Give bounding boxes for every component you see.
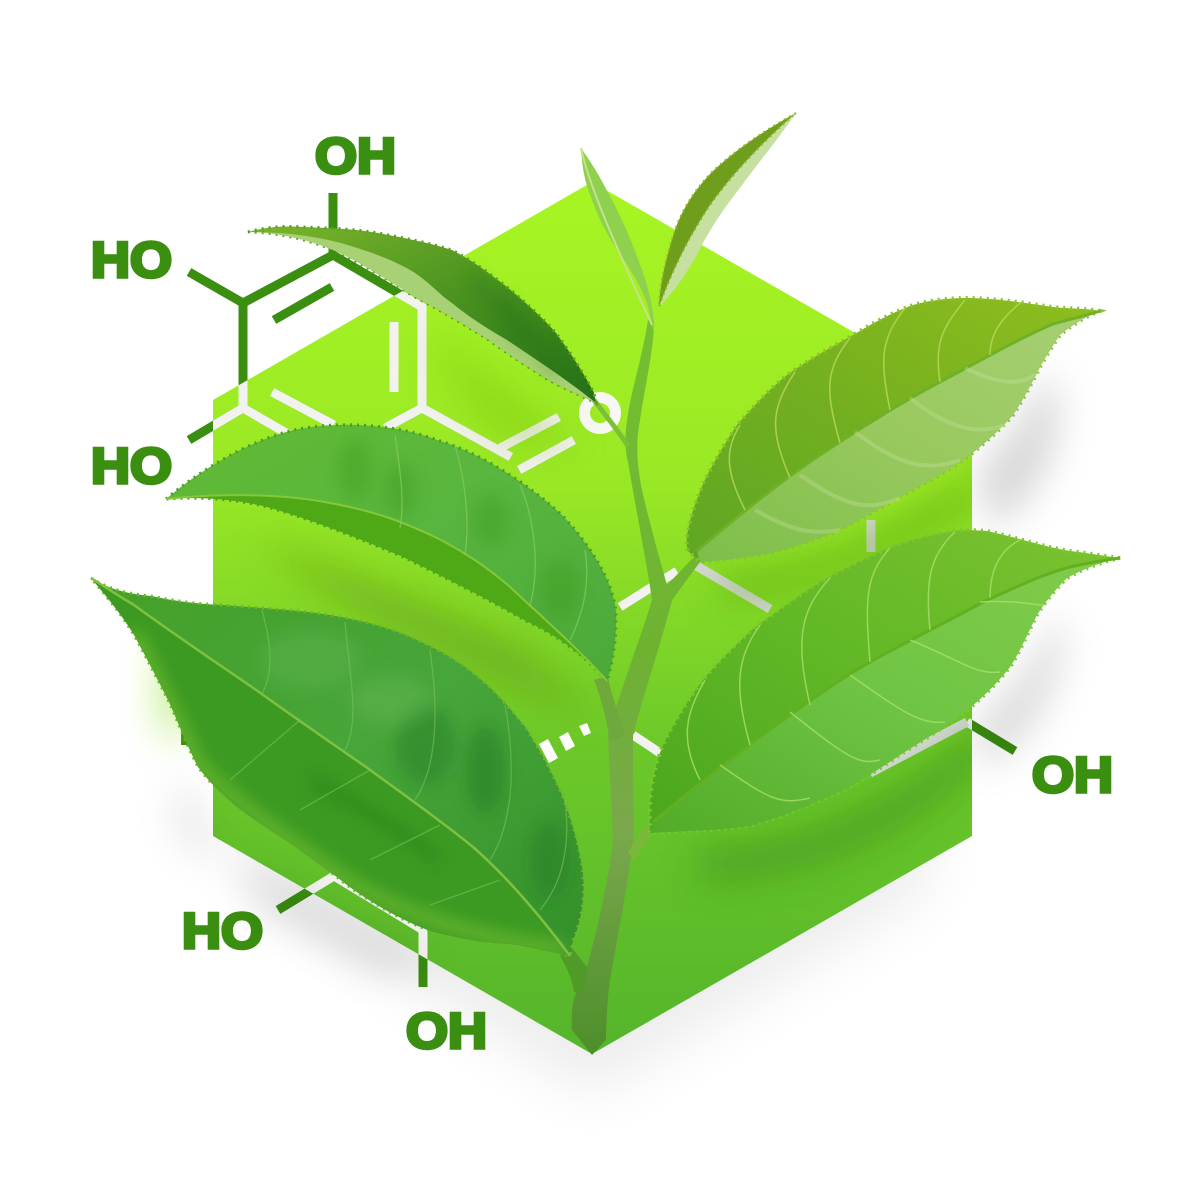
tea sprig bbox=[91, 113, 1120, 1055]
leaf shadows on hexagon bbox=[260, 330, 975, 880]
leaf B: middle left bbox=[166, 425, 616, 681]
peduncle: leaf B bbox=[594, 676, 625, 742]
background hexagon bbox=[213, 182, 972, 1054]
leaf shadows on white background bbox=[157, 370, 1064, 975]
molecule outside hexagon (dark green bonds) bbox=[189, 193, 1015, 987]
bud right bbox=[659, 113, 796, 307]
infographic: tea sprig over hexagon and molecule bbox=[90, 112, 1120, 1083]
molecule inside hexagon (white bonds) bbox=[213, 291, 972, 960]
leaf D: upper right bbox=[687, 298, 1100, 562]
peduncle: leaf C bbox=[560, 948, 587, 992]
label: upper HO: HO bbox=[91, 232, 172, 288]
label: right OH: OH bbox=[1032, 747, 1113, 803]
label: lower HO: HO bbox=[182, 903, 263, 959]
leaf C: lower left bbox=[91, 578, 584, 956]
leaf E: lower right bbox=[650, 530, 1120, 833]
leaf A: top left bbox=[248, 227, 596, 403]
label: middle HO: HO bbox=[91, 438, 172, 494]
hexagon drop shadow bbox=[260, 250, 930, 1095]
leaf B mottling bbox=[182, 446, 584, 658]
oxygen ring bbox=[584, 398, 616, 428]
peduncle: leaf E bbox=[628, 825, 655, 860]
dashed wedge bond bbox=[539, 723, 591, 763]
label: top OH: OH bbox=[315, 128, 396, 184]
label: bottom OH: OH bbox=[406, 1003, 487, 1059]
leaf C mottling and lower half bbox=[91, 578, 570, 956]
peduncle: leaf A bbox=[594, 400, 628, 446]
bud left bbox=[581, 148, 654, 335]
stem bbox=[572, 320, 700, 1055]
left bond fragment bbox=[181, 728, 191, 745]
shaded bonds under the right leaves bbox=[695, 520, 967, 773]
